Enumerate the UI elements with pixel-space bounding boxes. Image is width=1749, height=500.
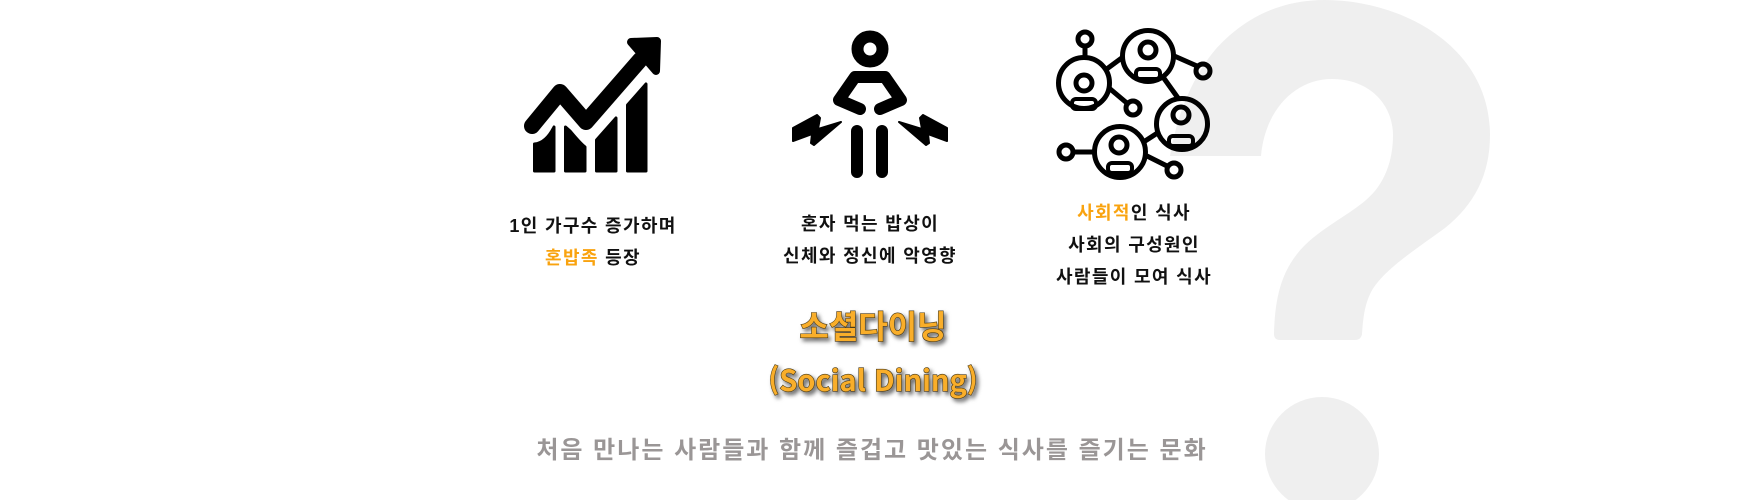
icon: stressed person with lightning [793, 36, 947, 172]
title: social dining: 소셜다이닝 [799, 302, 947, 348]
caption: single households: 1인 가구수 증가하며 [509, 216, 677, 236]
icon: rising chart with arrow [532, 41, 657, 171]
title: social dining: (Social Dining) [768, 358, 978, 400]
background question mark [1170, 0, 1490, 500]
caption: social meal: 사람들이 모여 식사 [1056, 267, 1212, 287]
description: 처음 만나는 사람들과 함께 즐겁고 맛있는 식사를 즐기는 문화 [536, 437, 1208, 464]
caption: social meal: 사회의 구성원인 [1068, 235, 1200, 255]
caption: single households: 혼밥족 등장 [545, 248, 641, 268]
caption: eating alone: 신체와 정신에 악영향 [783, 246, 957, 266]
icon: social network of people [1058, 30, 1210, 178]
caption: social meal [1056, 203, 1212, 287]
title: social dining [768, 302, 978, 400]
caption: eating alone: 혼자 먹는 밥상이 [801, 214, 939, 234]
caption: eating alone [783, 214, 957, 266]
caption: single households [509, 216, 677, 268]
caption: social meal: 사회적인 식사 [1077, 203, 1191, 223]
